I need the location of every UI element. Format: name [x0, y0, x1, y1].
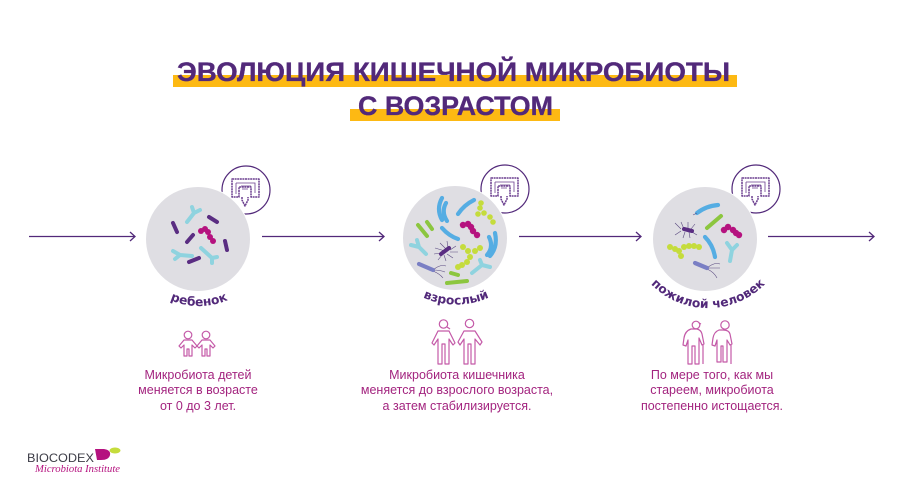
panel: adult	[361, 164, 553, 413]
panel: child	[138, 165, 271, 413]
arrow: start	[29, 232, 135, 241]
microbiota circle child	[146, 186, 250, 292]
title	[173, 56, 737, 121]
icon: adults	[432, 319, 482, 364]
logo: Biocodex Microbiota Institute	[27, 448, 121, 475]
text: elderly: постепенно истощается.	[641, 399, 783, 413]
logo: Biocodex Microbiota Institute: BIOCODEX	[27, 453, 94, 465]
arrow: end	[768, 232, 874, 241]
arrow: adult to elderly	[519, 232, 641, 241]
text: elderly: По мере того, как мы	[651, 368, 773, 382]
icon: gut child	[222, 166, 270, 214]
microbiota circle elderly	[652, 186, 758, 292]
text: adult: меняется до взрослого возраста,	[361, 383, 553, 397]
title: С ВОЗРАСТОМ	[358, 91, 553, 121]
text: child: Микробиота детей	[145, 368, 251, 382]
text: adult: Микробиота кишечника	[389, 368, 525, 382]
logo: Biocodex Microbiota Institute: Microbiota Institute	[34, 464, 121, 475]
text: child: от 0 до 3 лет.	[160, 399, 236, 413]
text: child: меняется в возрасте	[138, 383, 258, 397]
text: adult: а затем стабилизируется.	[383, 399, 531, 413]
icon: elderly people	[683, 321, 732, 364]
label: elderly: пожилой человек	[652, 280, 765, 308]
microbiota circle adult	[402, 186, 508, 290]
label: child: ребенок	[170, 294, 228, 306]
panel: elderly	[641, 164, 783, 413]
icon: children	[179, 331, 215, 356]
icon: gut adult	[481, 165, 529, 213]
icon: gut elderly	[732, 165, 780, 213]
title: ЭВОЛЮЦИЯ КИШЕЧНОЙ МИКРОБИОТЫ	[177, 56, 730, 87]
text: elderly: стареем, микробиота	[650, 383, 774, 397]
label: adult: взрослый	[424, 290, 488, 306]
arrow: child to adult	[262, 232, 384, 241]
